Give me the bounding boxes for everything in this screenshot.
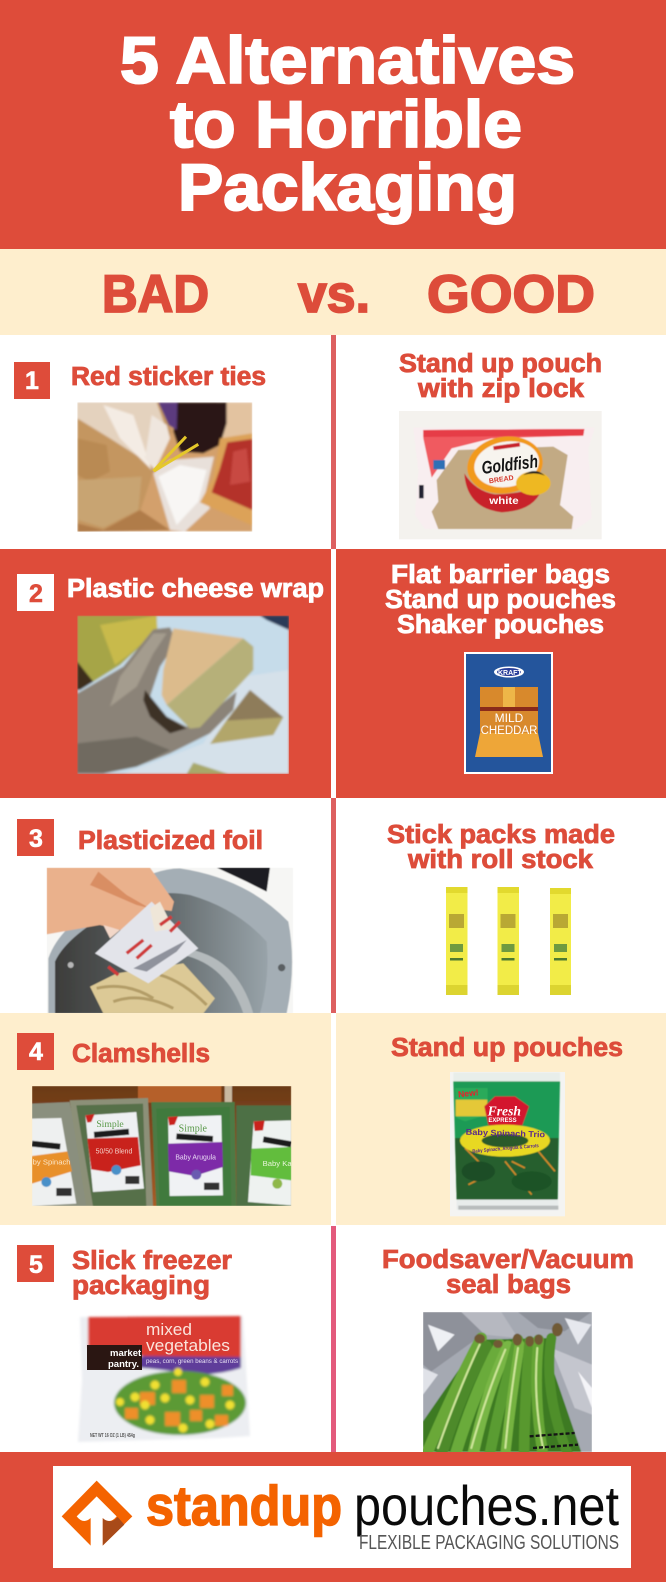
stick pack middle xyxy=(498,887,519,995)
number badge 4: 4 xyxy=(29,1038,43,1066)
heading: stand up pouch with zip lock: with zip lock xyxy=(417,375,585,403)
heading: flat barrier bags, stand up pouches, shaker pouches: Flat barrier bags xyxy=(391,561,610,589)
market pantry label: market xyxy=(110,1348,142,1359)
photo: fresh express pouch: Fresh xyxy=(487,1104,521,1119)
row 3 background xyxy=(0,798,666,1013)
heading: foodsaver / vacuum seal bags: seal bags xyxy=(446,1271,571,1299)
heading: foodsaver / vacuum seal bags xyxy=(382,1246,634,1299)
heading: slick freezer packaging xyxy=(72,1247,232,1300)
photo: salad clamshells: 50/50 Blend xyxy=(96,1147,132,1156)
photo: vacuum sealed asparagus xyxy=(423,1312,592,1455)
bad vs good band: GOOD xyxy=(427,265,595,324)
photo: kraft cheddar bag: CHEDDAR xyxy=(481,725,537,737)
photo: mixed vegetables bag: mixed xyxy=(146,1320,192,1339)
heading: plasticized foil: Plasticized foil xyxy=(78,827,263,855)
photo: kraft cheddar bag: KRAFT xyxy=(498,670,522,677)
bad vs good band xyxy=(0,249,666,335)
number badge 1 xyxy=(14,362,50,399)
stick pack right xyxy=(550,888,571,995)
heading: slick freezer packaging: packaging xyxy=(72,1272,210,1300)
photo: salad clamshells xyxy=(32,1086,298,1206)
photo: kraft cheddar bag xyxy=(464,652,553,774)
photo: fresh express pouch: Baby Spinach, Arugula & Carrots xyxy=(472,1143,539,1155)
stick pack left xyxy=(446,887,468,995)
row 5 background xyxy=(0,1225,666,1452)
heading: plastic cheese wrap: Plastic cheese wrap xyxy=(67,575,324,603)
heading: stand up pouch with zip lock: Stand up pouch xyxy=(399,350,602,378)
photo: goldfish bread pouch xyxy=(399,411,602,539)
photo: mixed vegetables bag: vegetables xyxy=(146,1336,230,1355)
row 1 background xyxy=(0,335,666,549)
heading: foodsaver / vacuum seal bags: Foodsaver/Vacuum xyxy=(382,1246,634,1274)
heading: red sticker ties: Red sticker ties xyxy=(71,363,266,391)
title: Packaging xyxy=(178,150,517,224)
photo: goldfish bread pouch: white xyxy=(488,496,519,507)
photo: cheese in hand xyxy=(77,616,289,774)
number badge 5 xyxy=(17,1245,54,1282)
photo: salad clamshells: by Spinach xyxy=(33,1158,71,1167)
heading: stick packs made with roll stock: Stick packs made xyxy=(387,821,615,849)
icon: diamond with up arrow xyxy=(62,1481,132,1548)
photo: mixed vegetables bag: NET WT 16 OZ (1 LB) 454g xyxy=(90,1433,135,1439)
market pantry label: pantry. xyxy=(108,1359,139,1370)
number badge 2: 2 xyxy=(29,580,43,608)
photo: salad clamshells: Simple xyxy=(179,1123,208,1134)
bad vs good band: vs. xyxy=(298,265,370,324)
number badge 4 xyxy=(17,1033,54,1070)
footer banner xyxy=(0,1452,666,1582)
heading: clamshells: Clamshells xyxy=(72,1040,210,1068)
photo: fresh express pouch: EXPRESS xyxy=(488,1118,517,1124)
heading: stick packs made with roll stock: with roll stock xyxy=(407,846,594,874)
photo: fresh express pouch xyxy=(450,1072,565,1216)
heading: slick freezer packaging: Slick freezer xyxy=(72,1247,232,1275)
number badge 3 xyxy=(17,819,54,856)
heading: flat barrier bags, stand up pouches, shaker pouches xyxy=(385,561,616,639)
photo: mixed vegetables bag: peas, corn, green beans & carrots xyxy=(146,1358,239,1365)
photo: ramen foil packet xyxy=(47,868,293,1013)
heading: stick packs made with roll stock xyxy=(387,821,615,874)
title xyxy=(120,23,575,224)
heading: flat barrier bags, stand up pouches, shaker pouches: Shaker pouches xyxy=(397,611,604,639)
logo wordmark black: pouches.net xyxy=(354,1474,619,1537)
photo: bread with twist tie xyxy=(77,402,252,532)
photo: salad clamshells: Baby Kale xyxy=(263,1159,298,1168)
header banner xyxy=(0,0,666,249)
number badge 2 xyxy=(17,574,54,611)
row 4 background xyxy=(0,1013,666,1225)
logo wordmark orange: standup xyxy=(146,1474,342,1537)
number badge 3: 3 xyxy=(29,825,43,853)
photo: three yellow stick packs xyxy=(446,887,571,995)
title: 5 Alternatives xyxy=(120,23,575,97)
photo: goldfish bread pouch: Goldfish xyxy=(480,451,539,478)
title: to Horrible xyxy=(170,87,522,161)
photo: salad clamshells: Simple xyxy=(96,1119,124,1130)
photo: fresh express pouch: New! xyxy=(457,1087,479,1099)
photo: mixed vegetables bag xyxy=(78,1316,250,1442)
footer logo panel xyxy=(53,1466,631,1568)
heading: stand up pouch with zip lock xyxy=(399,350,602,403)
market pantry label xyxy=(87,1345,142,1370)
photo: kraft cheddar bag: MILD xyxy=(495,711,524,725)
photo: goldfish bread pouch: BREAD xyxy=(489,475,514,485)
bad vs good band: BAD xyxy=(102,265,209,324)
number badge 5: 5 xyxy=(29,1251,43,1279)
photo: salad clamshells: Baby Arugula xyxy=(175,1152,217,1161)
row 2 background xyxy=(0,549,666,798)
heading: flat barrier bags, stand up pouches, shaker pouches: Stand up pouches xyxy=(385,586,616,614)
number badge 1: 1 xyxy=(25,367,39,395)
photo: fresh express pouch: Baby Spinach Trio xyxy=(466,1127,545,1139)
heading: stand up pouches: Stand up pouches xyxy=(391,1034,623,1062)
